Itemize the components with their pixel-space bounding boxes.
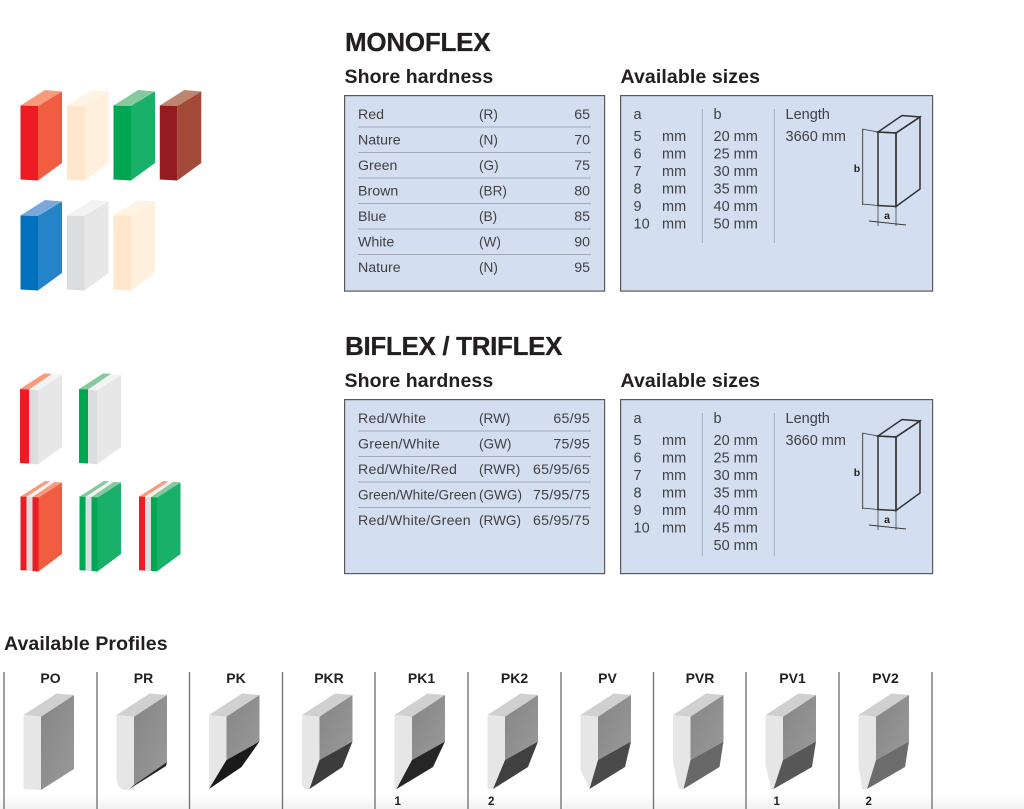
panel: monoflex available sizes table: 20 mm bbox=[714, 129, 758, 145]
panel: monoflex available sizes table: 30 mm bbox=[714, 164, 758, 180]
panel: monoflex shore hardness table: 85 bbox=[574, 209, 590, 225]
panel: biflex available sizes table: mm bbox=[662, 520, 686, 536]
panel: monoflex shore hardness table: (G) bbox=[479, 158, 499, 173]
panel: biflex available sizes table bbox=[621, 400, 933, 574]
panel: monoflex available sizes table: mm bbox=[662, 146, 686, 162]
panel: biflex available sizes table: 9 bbox=[634, 503, 642, 519]
panel: biflex available sizes table: 10 bbox=[634, 520, 650, 536]
panel: monoflex available sizes table: 9 bbox=[634, 199, 642, 215]
profile: PO bbox=[24, 670, 74, 790]
panel: monoflex shore hardness table: Brown bbox=[358, 184, 398, 200]
panel: monoflex available sizes table: mm bbox=[662, 199, 686, 215]
panel: monoflex shore hardness table: Red bbox=[358, 107, 384, 123]
panel: monoflex shore hardness table: 80 bbox=[574, 184, 590, 200]
block: red/white/green bbox=[139, 481, 180, 572]
panel: monoflex shore hardness table: (R) bbox=[479, 107, 498, 122]
profile: PVR bbox=[673, 670, 724, 789]
block: red bbox=[20, 90, 62, 180]
block: brown bbox=[160, 90, 201, 180]
heading: available profiles: Available Profiles bbox=[4, 633, 168, 655]
panel: biflex shore hardness table: (RW) bbox=[479, 411, 510, 426]
block: nature 95 bbox=[114, 200, 155, 290]
panel: biflex available sizes table: 45 mm bbox=[714, 520, 758, 536]
panel: monoflex shore hardness table: (W) bbox=[479, 234, 501, 250]
panel: monoflex available sizes table: b bbox=[714, 107, 722, 123]
block: red/white/red bbox=[20, 481, 62, 572]
profile: PK1 bbox=[394, 670, 445, 808]
panel: biflex shore hardness table: 65/95/75 bbox=[533, 513, 590, 529]
panel: monoflex available sizes table: 7 bbox=[634, 164, 642, 180]
panel: monoflex shore hardness table: 90 bbox=[574, 234, 590, 250]
heading: monoflex available sizes: Available sizes bbox=[620, 66, 760, 88]
panel: monoflex shore hardness table: 75 bbox=[574, 158, 590, 174]
panel: monoflex available sizes table: 35 mm bbox=[714, 182, 758, 198]
panel: biflex available sizes table: 50 mm bbox=[714, 538, 758, 554]
profile: PKR: PKR bbox=[314, 670, 344, 686]
profile: PKR bbox=[302, 670, 352, 789]
profile: PV1: PV1 bbox=[779, 670, 806, 686]
panel: monoflex shore hardness table: 70 bbox=[574, 132, 590, 148]
profile: PK bbox=[209, 670, 260, 789]
panel: biflex available sizes table: mm bbox=[662, 486, 686, 502]
panel: biflex shore hardness table: Green/White bbox=[358, 436, 440, 452]
icon: dimension diagram: b bbox=[854, 467, 860, 479]
panel: biflex available sizes table: 5 bbox=[634, 433, 642, 449]
profile: PV2 bbox=[858, 670, 909, 808]
panel: monoflex shore hardness table: (B) bbox=[479, 209, 497, 224]
panel: monoflex available sizes table: mm bbox=[662, 164, 686, 180]
panel: monoflex available sizes table bbox=[621, 96, 933, 291]
block: red/white bbox=[20, 374, 62, 464]
profile: PV: PV bbox=[598, 670, 617, 686]
profile: PK2: 2 bbox=[488, 796, 494, 808]
panel: biflex available sizes table: mm bbox=[662, 450, 686, 466]
profile: PK1: PK1 bbox=[408, 670, 435, 686]
panel: biflex available sizes table: 35 mm bbox=[714, 486, 758, 502]
heading: biflex shore hardness: Shore hardness bbox=[344, 370, 493, 392]
title: monoflex: MONOFLEX bbox=[345, 27, 491, 57]
profile: PV2: 2 bbox=[866, 796, 872, 808]
panel: monoflex shore hardness table: 65 bbox=[574, 107, 590, 123]
profile: PK1: 1 bbox=[394, 796, 402, 808]
block: green/white bbox=[79, 374, 121, 464]
block: green/white/green bbox=[80, 481, 121, 572]
panel: profile column dividers bbox=[4, 672, 932, 809]
panel: biflex shore hardness table: 65/95/65 bbox=[533, 462, 590, 478]
profile: PR: PR bbox=[134, 670, 153, 686]
panel: biflex shore hardness table: Green/White/Green bbox=[358, 488, 476, 504]
panel: biflex shore hardness table: Red/White/Green bbox=[358, 513, 471, 529]
panel: monoflex available sizes table: 3660 mm bbox=[786, 129, 846, 145]
profile: PVR: PVR bbox=[686, 670, 714, 686]
panel: biflex available sizes table: Length bbox=[786, 411, 830, 427]
panel: monoflex shore hardness table: 95 bbox=[574, 260, 590, 276]
profile: PK: PK bbox=[226, 670, 246, 686]
bottom haze bbox=[0, 794, 1024, 809]
panel: biflex available sizes table: 6 bbox=[634, 450, 642, 466]
panel: biflex available sizes table: 7 bbox=[634, 468, 642, 484]
panel: biflex available sizes table: mm bbox=[662, 503, 686, 519]
panel: monoflex shore hardness table: (N) bbox=[479, 260, 498, 275]
icon: dimension diagram: a bbox=[884, 210, 890, 222]
panel: monoflex shore hardness table: (N) bbox=[479, 132, 498, 148]
icon: dimension diagram bbox=[854, 116, 920, 226]
panel: biflex shore hardness table: (RWR) bbox=[479, 462, 520, 477]
panel: monoflex shore hardness table: White bbox=[358, 234, 394, 250]
icon: dimension diagram: a bbox=[884, 514, 890, 526]
panel: biflex shore hardness table: 75/95 bbox=[553, 436, 590, 452]
profile: PV1 bbox=[766, 670, 816, 808]
block: blue bbox=[20, 200, 62, 290]
panel: biflex shore hardness table: 65/95 bbox=[553, 411, 590, 427]
panel: biflex shore hardness table bbox=[345, 400, 605, 574]
panel: monoflex shore hardness table bbox=[345, 96, 605, 291]
panel: monoflex available sizes table: 40 mm bbox=[714, 199, 758, 215]
panel: biflex available sizes table: mm bbox=[662, 468, 686, 484]
profile: PV bbox=[580, 670, 631, 789]
profile: PK2: PK2 bbox=[501, 670, 528, 686]
panel: biflex shore hardness table: Red/White bbox=[358, 411, 426, 427]
profile: PO: PO bbox=[40, 670, 61, 686]
panel: monoflex available sizes table: Length bbox=[786, 107, 830, 123]
panel: monoflex available sizes table: 25 mm bbox=[714, 146, 758, 162]
heading: biflex available sizes: Available sizes bbox=[620, 370, 760, 392]
panel: monoflex available sizes table: mm bbox=[662, 129, 686, 145]
panel: biflex shore hardness table: (RWG) bbox=[479, 513, 521, 528]
icon: dimension diagram: b bbox=[854, 163, 860, 175]
panel: biflex available sizes table: 3660 mm bbox=[786, 433, 846, 449]
panel: monoflex shore hardness table: Nature bbox=[358, 132, 401, 148]
panel: monoflex available sizes table: 50 mm bbox=[714, 216, 758, 232]
panel: monoflex available sizes table: 5 bbox=[634, 129, 642, 145]
profile: PV1: 1 bbox=[774, 796, 780, 808]
panel: biflex shore hardness table: (GWG) bbox=[479, 488, 522, 502]
block: green bbox=[114, 90, 155, 180]
panel: biflex available sizes table: 8 bbox=[634, 486, 642, 502]
panel: biflex available sizes table: b bbox=[714, 411, 722, 427]
panel: monoflex shore hardness table: Green bbox=[358, 158, 397, 174]
panel: biflex shore hardness table: (GW) bbox=[479, 436, 511, 452]
panel: monoflex available sizes table: mm bbox=[662, 182, 686, 198]
profile: PK2 bbox=[488, 670, 538, 808]
panel: monoflex shore hardness table: (BR) bbox=[479, 184, 507, 198]
panel: biflex available sizes table: a bbox=[634, 411, 642, 427]
panel: monoflex available sizes table: 8 bbox=[634, 182, 642, 198]
title: biflex / triflex: BIFLEX / TRIFLEX bbox=[345, 331, 563, 361]
icon: dimension diagram bbox=[854, 420, 920, 530]
panel: biflex shore hardness table: Red/White/Red bbox=[358, 462, 457, 478]
heading: monoflex shore hardness: Shore hardness bbox=[344, 66, 493, 88]
panel: monoflex available sizes table: 6 bbox=[634, 146, 642, 162]
panel: monoflex shore hardness table: Nature bbox=[358, 260, 401, 276]
panel: biflex available sizes table: 25 mm bbox=[714, 450, 758, 466]
panel: monoflex available sizes table: mm bbox=[662, 216, 686, 232]
panel: biflex available sizes table: mm bbox=[662, 433, 686, 449]
panel: biflex shore hardness table: 75/95/75 bbox=[533, 488, 590, 504]
panel: monoflex colour blocks bbox=[20, 90, 201, 290]
panel: monoflex available sizes table: 10 bbox=[634, 216, 650, 232]
panel: biflex and triflex colour blocks bbox=[20, 374, 180, 572]
panel: biflex available sizes table: 30 mm bbox=[714, 468, 758, 484]
profile: PV2: PV2 bbox=[872, 670, 899, 686]
panel: monoflex available sizes table: a bbox=[634, 107, 642, 123]
profile: PR bbox=[116, 670, 167, 790]
panel: biflex available sizes table: 20 mm bbox=[714, 433, 758, 449]
panel: biflex available sizes table: 40 mm bbox=[714, 503, 758, 519]
block: white bbox=[67, 200, 108, 290]
panel: monoflex shore hardness table: Blue bbox=[358, 209, 387, 225]
block: nature bbox=[67, 90, 108, 180]
